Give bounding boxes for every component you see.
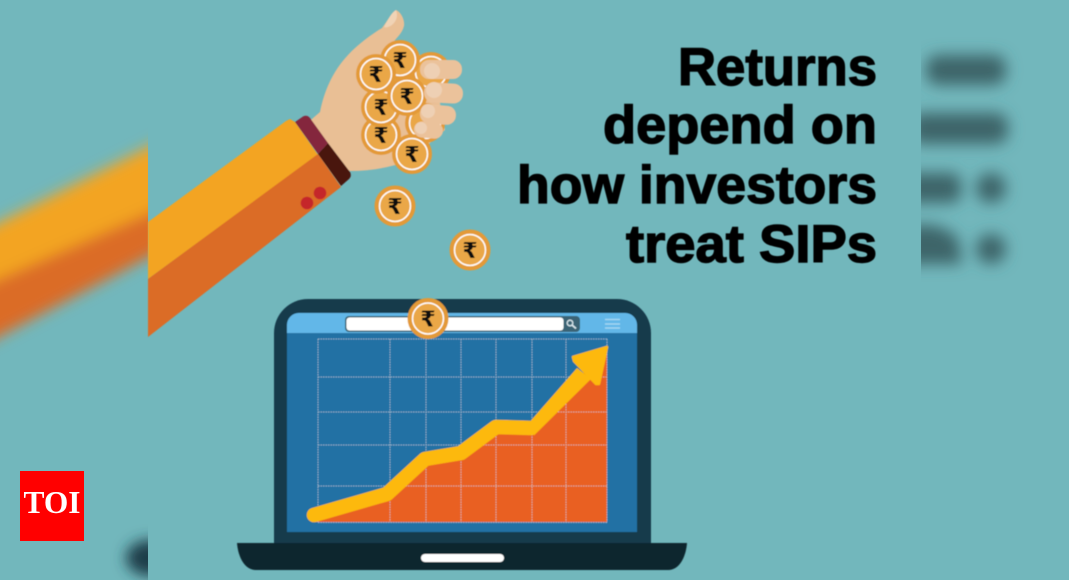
sleeve (148, 116, 351, 337)
hand (305, 10, 445, 171)
screen (287, 313, 637, 532)
coins in the hand: ₹ (399, 85, 415, 110)
blurred right strip: headline echo (905, 55, 1008, 264)
cuff maroon (295, 116, 328, 154)
fingers (413, 60, 463, 139)
coins in the hand: ₹ (373, 96, 389, 121)
coins in the hand: ₹ (373, 124, 389, 149)
coins in the hand (356, 40, 451, 174)
headline: depend on (603, 96, 877, 155)
laptop (237, 299, 687, 570)
illustration (148, 10, 687, 570)
laptop base (237, 543, 687, 570)
coins in the hand: ₹ (404, 143, 420, 168)
chart grid (318, 339, 607, 522)
laptop body (274, 299, 651, 543)
headline: Returns (678, 38, 877, 97)
cuff dark (318, 143, 351, 186)
headline: treat SIPs (626, 215, 877, 274)
falling coin 3 (408, 298, 448, 339)
falling coin 1: ₹ (387, 195, 403, 220)
falling coin 1 (374, 186, 416, 226)
cuff buttons (301, 187, 326, 209)
falling coin 2 (450, 230, 490, 270)
growth arrow (314, 347, 607, 515)
menu icon (605, 320, 620, 328)
search box (345, 316, 580, 332)
trackpad slot (421, 554, 504, 562)
logo: TOI: TOI (24, 484, 80, 520)
headline: how investors (517, 156, 877, 215)
coins in the hand: ₹ (392, 49, 408, 74)
area chart (313, 347, 607, 522)
browser bar (287, 313, 637, 333)
sleeve lower panel (148, 154, 341, 337)
falling coin 3: ₹ (420, 308, 436, 332)
blurred left strip: sleeve and laptop corner (0, 134, 148, 580)
logo: TOI (20, 471, 84, 541)
sleeve upper panel (148, 119, 318, 279)
falling coin 2: ₹ (462, 239, 478, 264)
coins in the hand: ₹ (368, 63, 384, 88)
headline (517, 38, 877, 274)
